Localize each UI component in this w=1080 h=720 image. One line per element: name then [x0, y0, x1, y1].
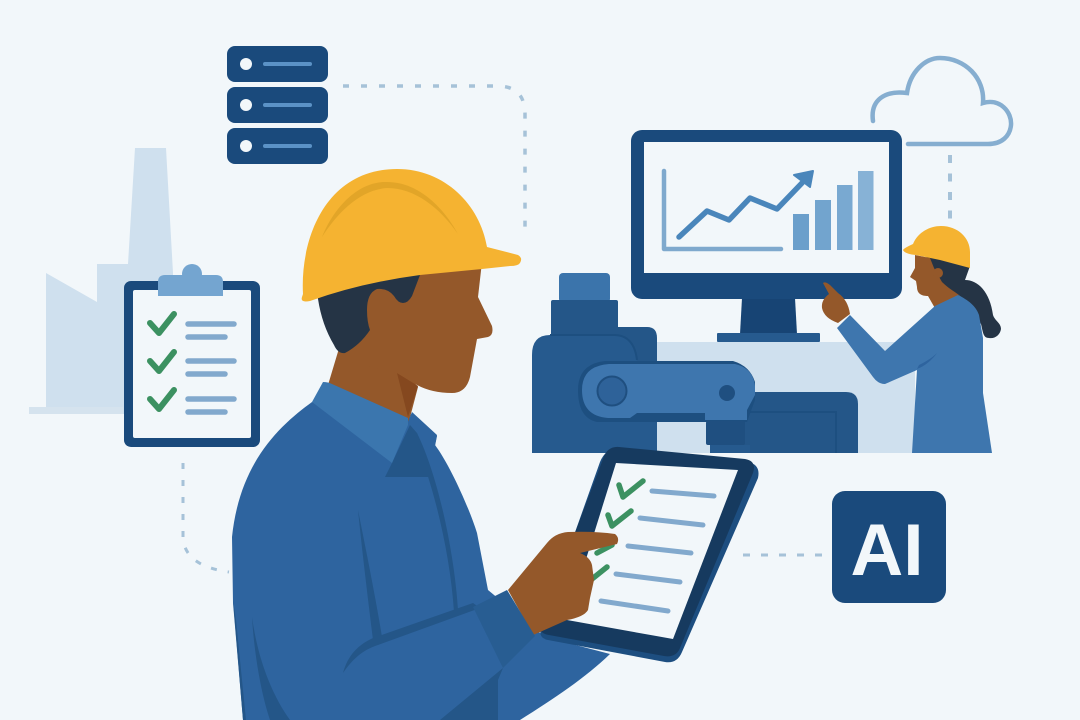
connector: tablet to AI — [743, 554, 826, 556]
connector: clipboard to worker — [183, 463, 229, 572]
checklist rows — [592, 481, 714, 611]
hair ponytail — [926, 256, 1001, 338]
head — [340, 262, 492, 393]
main worker — [232, 169, 610, 720]
AI badge: AI — [850, 510, 924, 591]
icon: factory silhouette — [29, 148, 173, 414]
desk surface — [657, 342, 915, 453]
robotic machine — [532, 273, 858, 453]
monitor with analytics chart — [631, 130, 902, 342]
hard hat — [903, 226, 970, 268]
connector: server to machine — [343, 86, 525, 236]
icon: server stack — [227, 46, 328, 164]
neck — [325, 345, 418, 425]
shirt folds — [233, 425, 503, 720]
worker: woman pointing at monitor — [822, 226, 1001, 453]
tablet with checklist — [540, 447, 759, 662]
connector: cloud to worker — [948, 155, 952, 220]
face and neck — [910, 255, 959, 310]
sleeve fold — [917, 353, 937, 369]
hair — [316, 265, 422, 353]
chart: bars — [793, 171, 874, 250]
shirt body — [232, 402, 610, 720]
chart: axes — [664, 171, 781, 249]
AI badge — [832, 491, 946, 603]
hard hat — [302, 169, 521, 302]
robot arm — [578, 361, 755, 453]
shirt — [837, 295, 992, 453]
collar — [312, 382, 408, 463]
chart: rising trend arrow — [679, 171, 813, 237]
icon: cloud outline — [873, 58, 1011, 144]
pointing hand — [822, 282, 850, 323]
machine base box — [735, 392, 858, 453]
ear — [933, 268, 943, 278]
icon: clipboard checklist — [124, 264, 260, 447]
main worker hand and cuff — [473, 532, 618, 668]
